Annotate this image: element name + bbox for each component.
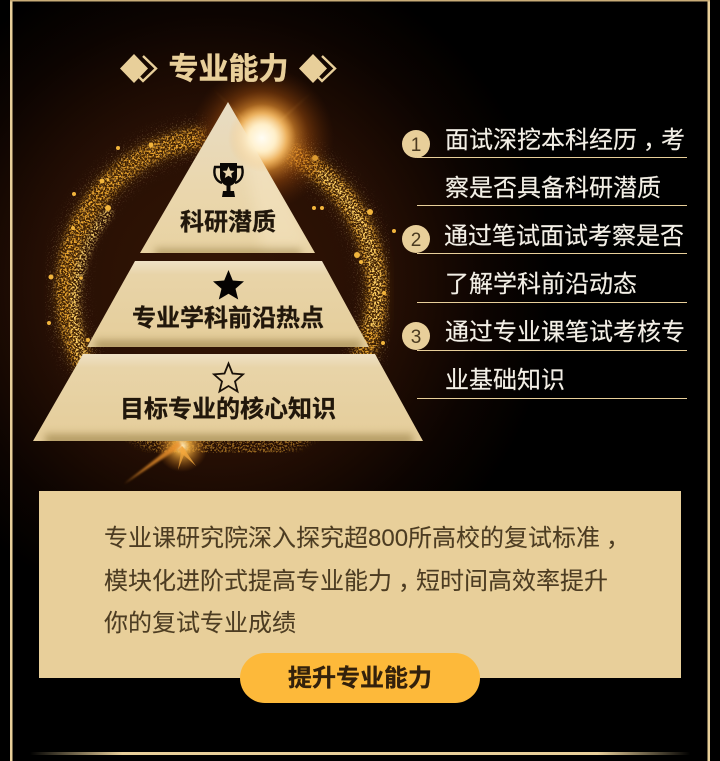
heading: 专业能力 [168, 53, 288, 86]
list item 2: 了解学科前沿动态 [445, 271, 637, 298]
golden sparkle ring [47, 137, 396, 447]
icon: trophy [214, 163, 243, 197]
light flare bottom [124, 420, 208, 484]
pyramid [33, 102, 423, 446]
button: 提升专业能力 [288, 665, 432, 692]
icon: outline star [214, 364, 243, 392]
button [240, 653, 480, 703]
panel: description [39, 491, 681, 678]
list item 1: 察是否具备科研潜质 [445, 175, 661, 202]
tier: bottom [33, 354, 423, 446]
description text [104, 525, 630, 637]
icon: left diamonds [120, 54, 156, 83]
label: 目标专业的核心知识 [120, 396, 336, 423]
list item 1: 面试深挖本科经历，考 [445, 127, 685, 154]
list item 2: 2 [411, 230, 421, 251]
light flare core over pyramid edge [228, 104, 296, 172]
list item 3: 通过专业课笔试考核专 [445, 319, 685, 346]
list item 1 [402, 127, 687, 206]
tier: top [140, 102, 315, 260]
tier: middle [87, 261, 369, 352]
list item 2: 通过笔试面试考察是否 [444, 223, 684, 250]
label: 科研潜质 [180, 209, 276, 236]
description text: 模块化进阶式提高专业能力，短时间高效率提升 [104, 568, 608, 595]
list item 3 [402, 319, 687, 399]
label: 专业学科前沿热点 [132, 305, 324, 332]
light flare top [190, 66, 334, 210]
list item 3: 3 [411, 327, 421, 348]
description text: 专业课研究院深入探究超800所高校的复试标准， [104, 525, 630, 552]
description text: 你的复试专业成绩 [104, 610, 296, 637]
icon: right diamonds [299, 54, 335, 83]
list item 3: 业基础知识 [445, 367, 565, 394]
list [402, 127, 687, 399]
list item 1: 1 [411, 135, 421, 156]
section title [120, 53, 335, 86]
list item 2 [402, 223, 687, 303]
icon: filled star [213, 270, 244, 300]
